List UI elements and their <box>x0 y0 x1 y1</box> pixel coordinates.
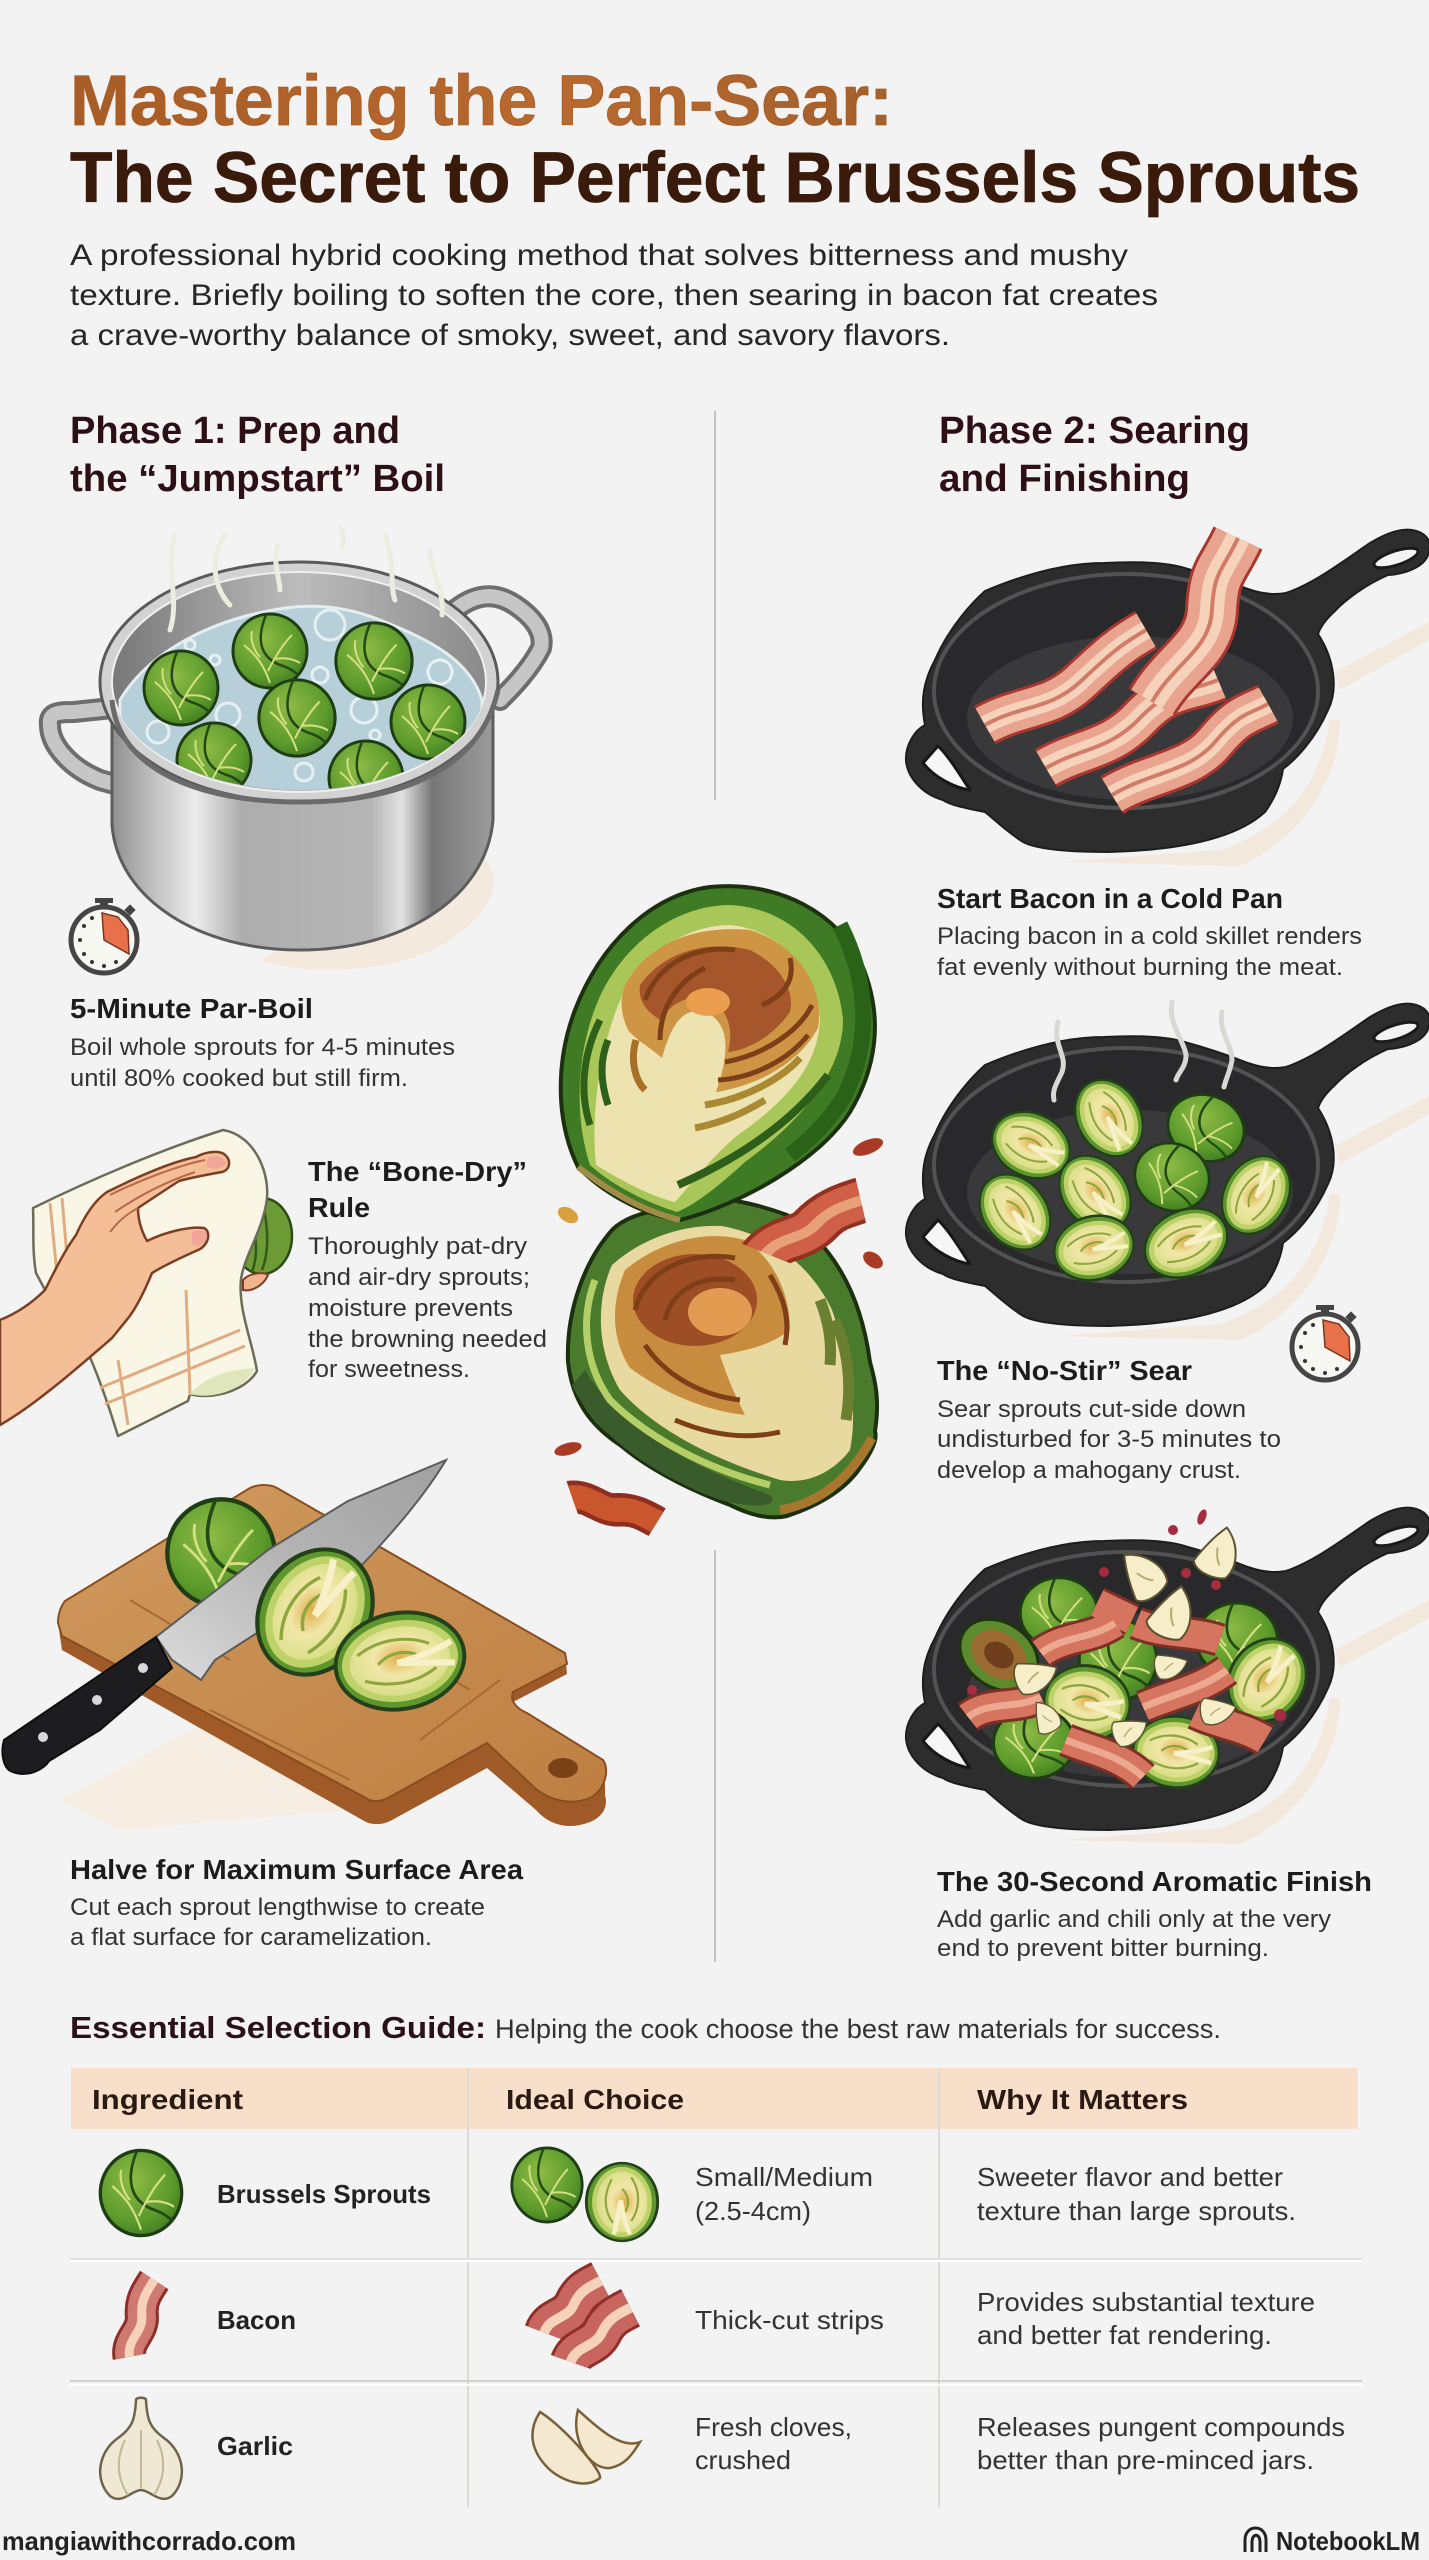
text: aromatic finish <box>937 1866 1372 1962</box>
heading: phase 2: Phase 2: Searing <box>939 410 1250 452</box>
text: no-stir sear: undisturbed for 3-5 minutes to <box>937 1426 1281 1453</box>
heading: essential selection guide: Essential Selection Guide: <box>70 2010 486 2045</box>
illustration: cutting board, knife and sprouts <box>2 1460 606 1830</box>
table header: Ingredient <box>92 2084 243 2115</box>
intro text <box>70 239 1158 352</box>
row: brussels sprouts: texture than large sprouts. <box>977 2196 1296 2226</box>
heading: phase 1: Phase 1: Prep and <box>70 410 400 452</box>
text: bone-dry rule: moisture prevents <box>308 1295 513 1322</box>
text: bone-dry rule: and air-dry sprouts; <box>308 1264 530 1291</box>
heading: phase 2: and Finishing <box>939 458 1190 500</box>
heading: phase 1 <box>70 410 445 500</box>
row: garlic: Releases pungent compounds <box>977 2412 1345 2442</box>
text: no-stir sear: Sear sprouts cut-side down <box>937 1396 1246 1423</box>
bacon bit: lower <box>572 1488 658 1530</box>
title: Mastering the Pan-Sear: <box>70 62 893 141</box>
illustration: sprouts searing in pan <box>906 1002 1429 1340</box>
table header: Ideal Choice <box>506 2084 684 2115</box>
table: selection guide <box>70 2068 1362 2507</box>
title <box>70 62 1360 218</box>
illustration: aromatic finish pan <box>906 1508 1429 1844</box>
text: 5-minute par-boil: Boil whole sprouts for 4-5 minutes <box>70 1034 455 1061</box>
text: start bacon in a cold pan: Placing bacon in a cold skillet renders <box>937 923 1362 950</box>
illustration: bacon in cold pan <box>906 530 1429 866</box>
sprout half: bottom <box>568 1199 877 1517</box>
text: aromatic finish: end to prevent bitter burning. <box>937 1935 1269 1962</box>
text: bone-dry rule <box>308 1156 547 1383</box>
row: brussels sprouts: Sweeter flavor and better <box>977 2162 1283 2192</box>
text: bone-dry rule: for sweetness. <box>308 1356 470 1383</box>
title: The Secret to Perfect Brussels Sprouts <box>70 139 1360 218</box>
heading: essential selection guide <box>70 2010 1221 2045</box>
illustration: hand drying sprout with towel <box>0 1130 292 1436</box>
text: no-stir sear: The “No-Stir” Sear <box>937 1355 1192 1386</box>
row: garlic: crushed <box>695 2445 791 2475</box>
text: start bacon in a cold pan: fat evenly without burning the meat. <box>937 954 1343 981</box>
text: bone-dry rule: the browning needed <box>308 1326 547 1353</box>
text: start bacon in a cold pan <box>937 883 1362 981</box>
text: halve for maximum surface area: a flat surface for caramelization. <box>70 1924 432 1951</box>
row: garlic: Fresh cloves, <box>695 2412 852 2442</box>
heading: phase 2 <box>939 410 1250 500</box>
text: no-stir sear <box>937 1355 1281 1484</box>
icon: stopwatch searing <box>1292 1305 1358 1380</box>
illustration: boiling pot <box>50 528 542 970</box>
row: garlic: Garlic <box>217 2431 293 2461</box>
text: 5-minute par-boil: 5-Minute Par-Boil <box>70 993 313 1024</box>
illustration: seared sprout halves <box>553 886 886 1530</box>
row: bacon: and better fat rendering. <box>977 2320 1272 2350</box>
row: bacon: Thick-cut strips <box>695 2305 884 2335</box>
text: no-stir sear: develop a mahogany crust. <box>937 1457 1241 1484</box>
text: aromatic finish: The 30-Second Aromatic Finish <box>937 1866 1372 1897</box>
icon: stopwatch <box>71 898 137 973</box>
row: bacon: Bacon <box>217 2305 296 2335</box>
crumbs <box>553 1135 886 1458</box>
text: aromatic finish: Add garlic and chili only at the very <box>937 1906 1331 1933</box>
text: bone-dry rule: Rule <box>308 1192 370 1223</box>
sprout half: top <box>561 886 875 1220</box>
table header: Why It Matters <box>977 2084 1188 2115</box>
row: bacon <box>119 2279 1315 2362</box>
text: halve for maximum surface area: Halve for Maximum Surface Area <box>70 1854 523 1885</box>
intro text: texture. Briefly boiling to soften the core, then searing in bacon fat creates <box>70 279 1158 312</box>
row: brussels sprouts: (2.5-4cm) <box>695 2196 811 2226</box>
row: garlic: better than pre-minced jars. <box>977 2445 1314 2475</box>
footer: website: mangiawithcorrado.com <box>2 2526 296 2556</box>
text: bone-dry rule: Thoroughly pat-dry <box>308 1233 527 1260</box>
intro text: a crave-worthy balance of smoky, sweet, and savory flavors. <box>70 319 950 352</box>
heading: essential selection guide: Helping the cook choose the best raw materials for success. <box>495 2014 1221 2044</box>
heading: phase 1: the “Jumpstart” Boil <box>70 458 445 500</box>
footer: notebooklm logo: NotebookLM <box>1276 2526 1420 2556</box>
text: halve for maximum surface area <box>70 1854 523 1951</box>
text: 5-minute par-boil <box>70 993 455 1092</box>
row: bacon: Provides substantial texture <box>977 2287 1315 2317</box>
row: garlic <box>100 2398 1345 2499</box>
text: 5-minute par-boil: until 80% cooked but still firm. <box>70 1065 408 1092</box>
text: bone-dry rule: The “Bone-Dry” <box>308 1156 527 1187</box>
table header <box>71 2068 1358 2129</box>
bacon bit: large <box>761 1199 865 1253</box>
row: brussels sprouts: Small/Medium <box>695 2162 873 2192</box>
text: start bacon in a cold pan: Start Bacon in a Cold Pan <box>937 883 1283 914</box>
row: brussels sprouts: Brussels Sprouts <box>217 2179 431 2209</box>
text: halve for maximum surface area: Cut each sprout lengthwise to create <box>70 1894 485 1921</box>
row: brussels sprouts <box>100 2148 1296 2241</box>
intro text: A professional hybrid cooking method that solves bitterness and mushy <box>70 239 1128 272</box>
